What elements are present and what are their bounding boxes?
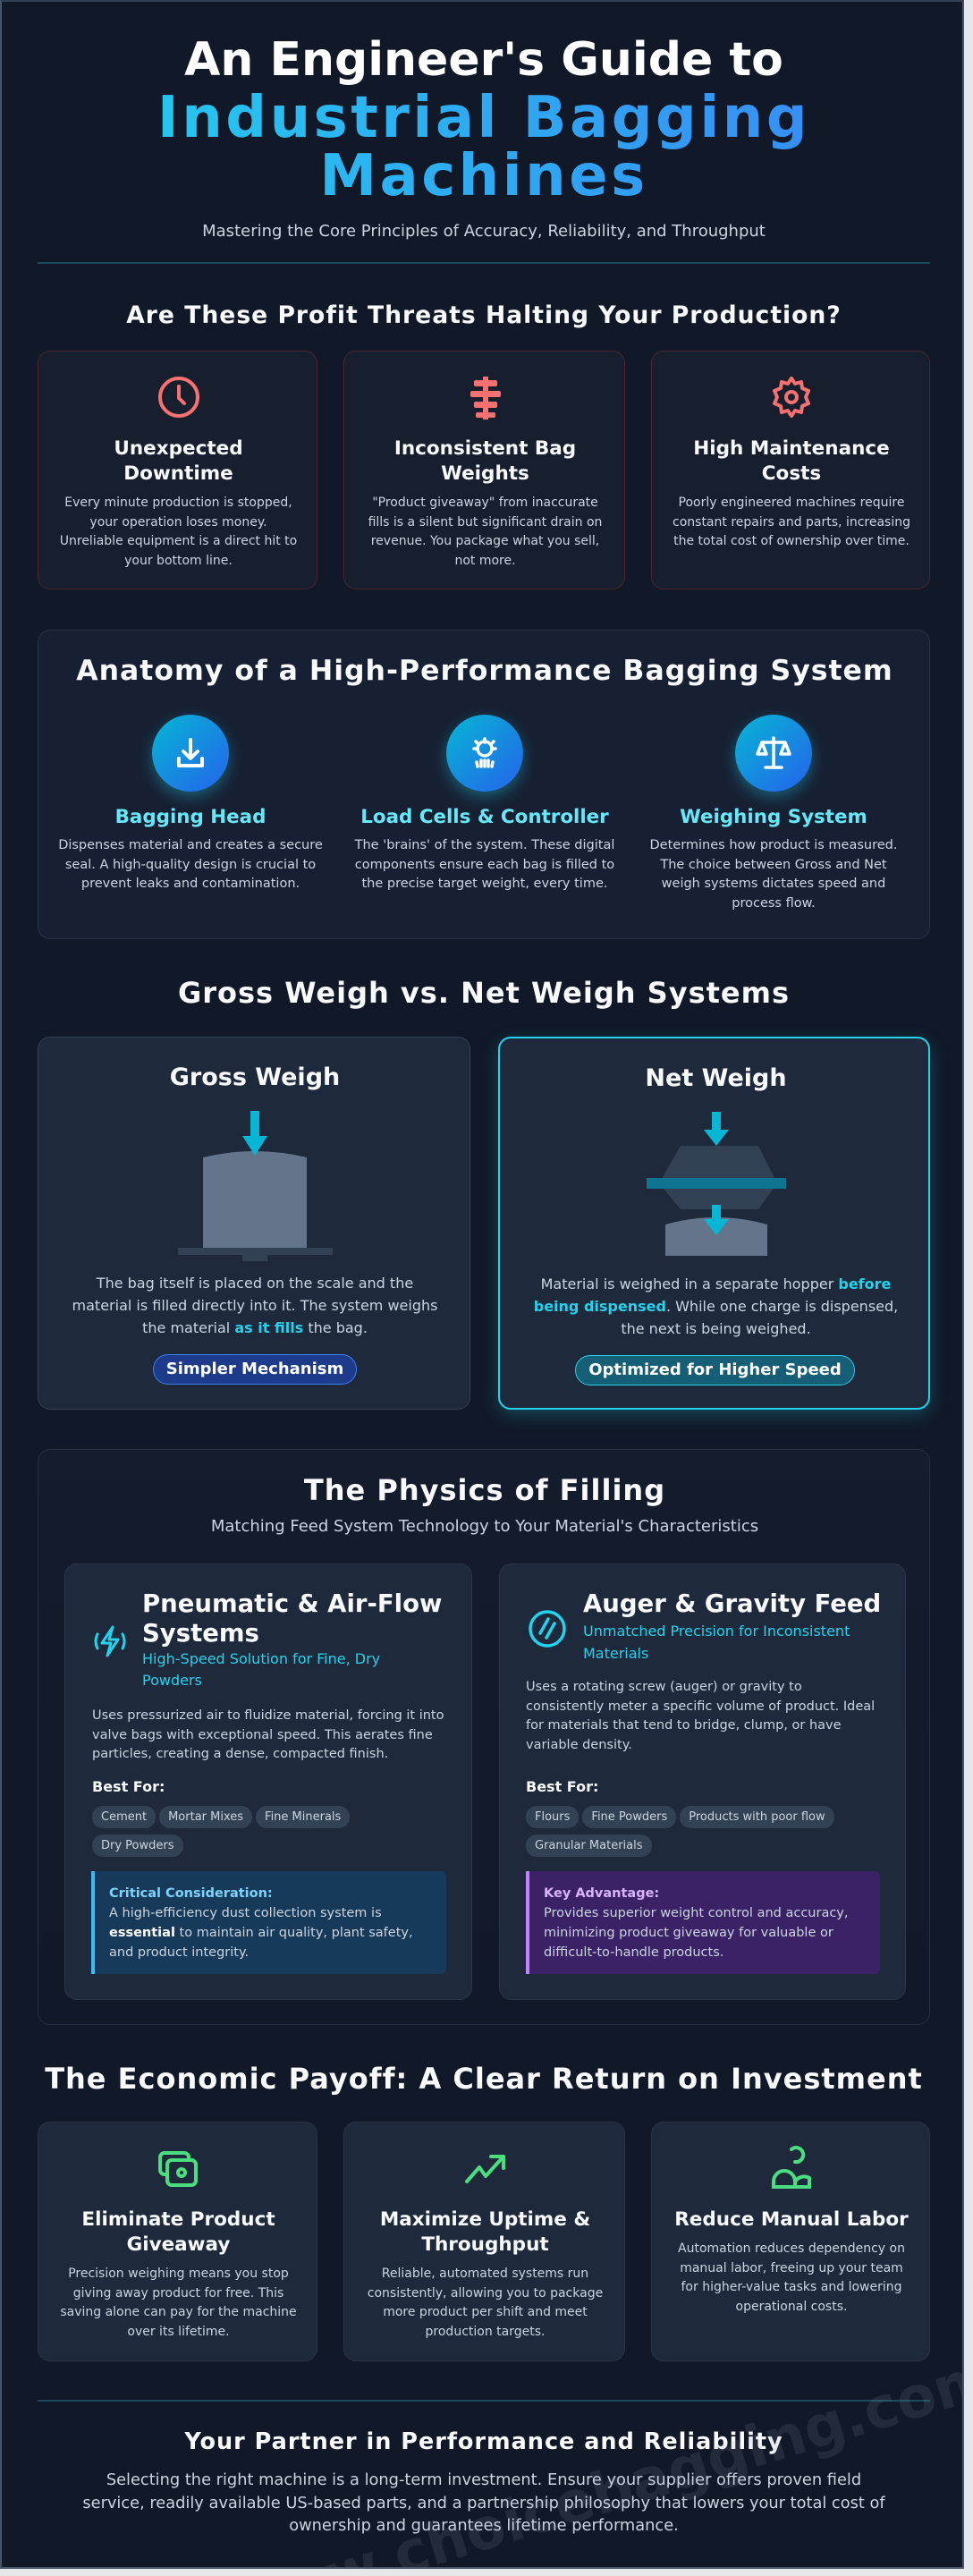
icon: controller <box>446 715 523 792</box>
title: Machines <box>319 143 648 209</box>
title: An Engineer's Guide to <box>184 33 783 87</box>
subpanel: auger: Uses a rotating screw (auger) or gravity to consistently meter a specific volume of product. Ideal for materials that tend to bridge, clump, or have variable density. <box>526 1680 875 1751</box>
panel: threat downtime: Downtime <box>123 462 233 485</box>
subtitle: Mastering the Core Principles of Accuracy, Reliability, and Throughput <box>202 222 766 241</box>
subpanel: pneumatic: High-Speed Solution for Fine, Dry Powders <box>142 1650 380 1689</box>
panel: threat maintenance <box>651 351 930 589</box>
item: weighing system: Determines how product is measured. The choice between Gross and Net weigh systems dictates speed and process flow. <box>649 838 897 911</box>
item: bagging head <box>58 714 323 891</box>
heading: partner: Your Partner in Performance and Reliability <box>184 2428 783 2455</box>
callout: critical: Critical Consideration: <box>109 1886 273 1901</box>
subpanel: pneumatic: Pneumatic & Air-Flow Systems <box>142 1589 442 1648</box>
icon: gear <box>773 376 810 419</box>
subpanel: auger: Unmatched Precision for Inconsistent Materials <box>583 1623 850 1662</box>
heading: economic payoff: The Economic Payoff: A Clear Return on Investment <box>45 2062 923 2096</box>
panel: giveaway: Giveaway <box>127 2233 230 2256</box>
callout: key advantage: Provides superior weight control and accuracy, minimizing product giveaway for valuable or difficult-to-handle products. <box>544 1906 848 1960</box>
panel: physics of filling <box>38 1449 930 2025</box>
panel: labor <box>651 2122 930 2361</box>
panel: net weigh <box>498 1037 930 1410</box>
tags: Dry Powders <box>101 1839 174 1852</box>
panel: threat maintenance: Costs <box>762 462 821 485</box>
panel: gross weigh <box>38 1037 470 1410</box>
subpanel: pneumatic: Uses pressurized air to fluidize material, forcing it into valve bags with exceptional speed. This aerates fine particles, creating a dense, compacted finish. <box>92 1708 444 1761</box>
diagram: net <box>647 1112 786 1256</box>
panel: threat downtime <box>38 351 317 589</box>
panel: threat weights: Weights <box>441 462 529 485</box>
panel: giveaway <box>38 2122 317 2361</box>
badge: speed <box>575 1355 855 1385</box>
panel: threat maintenance: High Maintenance <box>693 437 890 460</box>
panel: threat weights <box>343 351 625 589</box>
callout: critical: A high-efficiency dust collection system is essential to maintain air quality, plant safety, and product integrity. <box>109 1906 413 1960</box>
tags: Fine Minerals <box>265 1810 341 1824</box>
panel: net weigh: Net Weigh <box>645 1064 787 1092</box>
icon: clock <box>158 377 199 418</box>
subpanel: auger: Auger & Gravity Feed <box>583 1589 881 1618</box>
panel: threat weights: Inconsistent Bag <box>394 437 576 460</box>
callout: critical <box>91 1871 446 1974</box>
panel: threat maintenance: Poorly engineered machines require constant repairs and parts, increasing the total cost of ownership over time. <box>673 496 910 548</box>
tags: Mortar Mixes <box>168 1810 243 1824</box>
item: bagging head: Dispenses material and creates a secure seal. A high-quality design is crucial to prevent leaks and contamination. <box>58 838 323 891</box>
badge: simpler: Simpler Mechanism <box>166 1360 343 1378</box>
tags: Granular Materials <box>535 1839 643 1852</box>
title <box>157 33 810 209</box>
icon: person <box>772 2146 811 2189</box>
subpanel: pneumatic: Best For: <box>92 1778 165 1795</box>
panel: threat downtime: Unexpected <box>114 437 243 460</box>
item: load cells: The 'brains' of the system. These digital components ensure each bag is filled to the precise target weight, every time. <box>355 838 614 891</box>
panel: uptime <box>343 2122 625 2361</box>
panel: giveaway: Precision weighing means you stop giving away product for free. This saving alone can pay for the machine over its lifetime. <box>60 2267 297 2338</box>
subpanel: auger: Best For: <box>526 1778 598 1795</box>
tags: Products with poor flow <box>689 1810 825 1824</box>
panel: threat downtime: Every minute production is stopped, your operation loses money. Unreliable equipment is a direct hit to your bottom line. <box>60 496 297 567</box>
subpanel: auger <box>499 1563 906 2000</box>
tags: Fine Powders <box>591 1810 667 1824</box>
panel: uptime: Throughput <box>421 2233 549 2256</box>
panel: physics of filling: The Physics of Filling <box>304 1473 665 1507</box>
panel: gross weigh: The bag itself is placed on the scale and the material is filled directly into it. The system weighs the material as it fills the bag. <box>72 1275 437 1336</box>
badge: simpler <box>153 1354 357 1385</box>
icon: money <box>158 2151 198 2187</box>
item: weighing system: Weighing System <box>680 806 867 828</box>
panel: giveaway: Eliminate Product <box>81 2208 275 2231</box>
tags <box>526 1806 834 1857</box>
panel: labor: Automation reduces dependency on manual labor, freeing up your team for higher-value tasks and lowering operational costs. <box>678 2241 905 2313</box>
tags: Cement <box>101 1810 147 1824</box>
panel: labor: Reduce Manual Labor <box>674 2208 909 2231</box>
panel: uptime: Reliable, automated systems run consistently, allowing you to package more product per shift and meet production targets. <box>368 2267 603 2338</box>
icon: balance <box>735 715 812 792</box>
icon: scale <box>470 377 501 419</box>
panel: threat weights: "Product giveaway" from inaccurate fills is a silent but significant drain on revenue. You package what you sell, not more. <box>368 496 602 567</box>
icon: bolt <box>95 1626 125 1657</box>
panel: uptime: Maximize Uptime & <box>380 2208 590 2231</box>
panel: net weigh: Material is weighed in a separate hopper before being dispensed. While one charge is dispensed, the next is being weighed. <box>534 1275 898 1337</box>
panel: anatomy <box>38 630 930 939</box>
panel: physics of filling: Matching Feed System Technology to Your Material's Characteristics <box>211 1517 758 1536</box>
icon: auger <box>529 1610 566 1648</box>
text: partner: Selecting the right machine is a long-term investment. Ensure your supplier offers proven field service, readily available US-based parts, and a partnership philosophy that lowers your total cost of ownership and guarantees lifetime performance. <box>82 2470 885 2535</box>
heading: gross vs net: Gross Weigh vs. Net Weigh Systems <box>178 976 790 1010</box>
callout: key advantage: Key Advantage: <box>544 1886 659 1901</box>
item: load cells: Load Cells & Controller <box>360 806 609 828</box>
heading: profit threats: Are These Profit Threats Halting Your Production? <box>126 301 842 329</box>
item: load cells <box>354 714 614 891</box>
panel: gross weigh: Gross Weigh <box>170 1063 340 1091</box>
heading: anatomy: Anatomy of a High-Performance Bagging System <box>76 655 893 687</box>
tags <box>92 1806 350 1857</box>
badge: speed: Optimized for Higher Speed <box>588 1360 842 1379</box>
diagram: gross <box>178 1111 333 1261</box>
tags: Flours <box>535 1810 570 1824</box>
title: Industrial Bagging <box>157 85 810 151</box>
item: bagging head: Bagging Head <box>115 806 266 828</box>
icon: download <box>152 715 229 792</box>
callout: key advantage <box>526 1871 880 1974</box>
icon: trend up <box>465 2154 506 2184</box>
subpanel: pneumatic <box>64 1563 472 2000</box>
item: weighing system <box>649 714 897 911</box>
